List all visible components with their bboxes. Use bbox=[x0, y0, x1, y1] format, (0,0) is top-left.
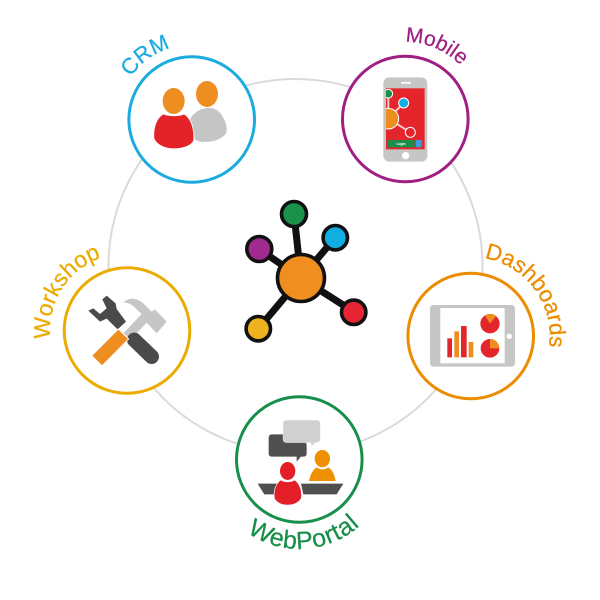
label: Mobile: Mobile bbox=[406, 27, 466, 64]
icon: two people bbox=[154, 81, 227, 148]
central network icon bbox=[246, 202, 366, 341]
label: Dashboards: Dashboards bbox=[486, 243, 566, 347]
node: CRM bbox=[122, 34, 256, 184]
node: Mobile bbox=[341, 27, 470, 184]
node: Dashboards bbox=[406, 243, 566, 400]
label: Workshop: Workshop bbox=[34, 248, 99, 339]
icon: smartphone: Login bbox=[396, 142, 406, 146]
icon: people in discussion bbox=[258, 420, 343, 505]
icon: crossed tools bbox=[88, 296, 167, 366]
large connecting ring bbox=[108, 79, 482, 453]
icon: smartphone bbox=[378, 77, 427, 162]
icon: tablet with charts bbox=[430, 305, 515, 367]
node: Workshop bbox=[34, 248, 192, 395]
node: WebPortal bbox=[235, 395, 364, 550]
label: WebPortal: WebPortal bbox=[251, 512, 359, 550]
infographic: hub and spoke diagram bbox=[34, 27, 566, 550]
label: CRM: CRM bbox=[122, 34, 169, 74]
